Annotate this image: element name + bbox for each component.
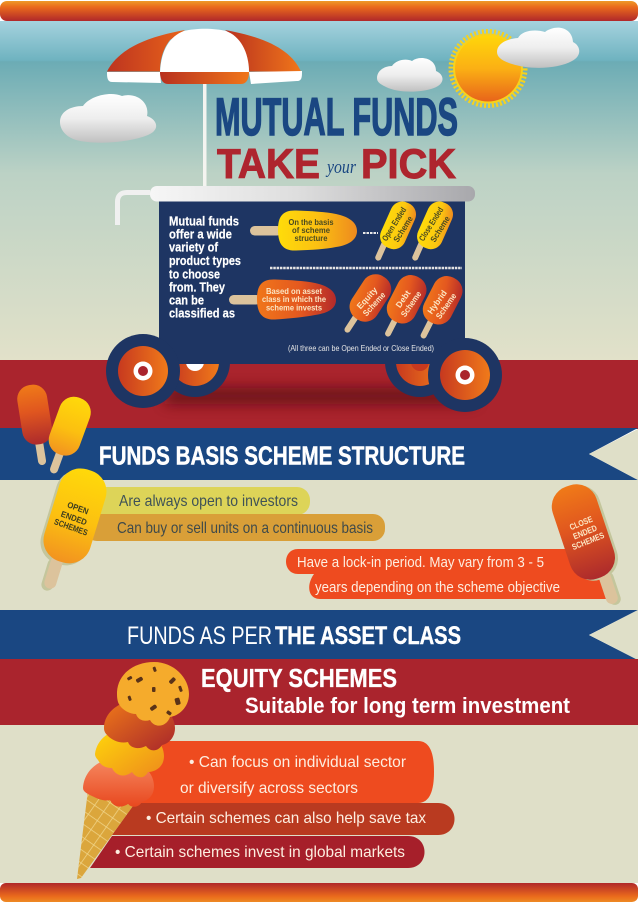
cart handle xyxy=(118,192,150,225)
title line: take your pick: PICK xyxy=(361,140,456,187)
popsicle: yellow decorative xyxy=(38,393,95,479)
pill: individual sector: • Can focus on individual sector xyxy=(189,754,407,771)
popsicle: open ended schemes: OPEN xyxy=(66,500,90,516)
popsicle: debt scheme xyxy=(374,270,431,344)
banner: equity schemes: EQUITY SCHEMES xyxy=(201,663,397,693)
banner: funds as per the asset class xyxy=(0,610,638,660)
cloud left xyxy=(60,94,156,143)
front wheels xyxy=(106,334,502,412)
title xyxy=(215,88,458,187)
cart intro text: Mutual funds xyxy=(169,214,239,228)
popsicle: open ended schemes: ENDED xyxy=(60,509,88,527)
pill: individual sector xyxy=(140,741,434,803)
popsicle: open ended schemes xyxy=(27,463,112,599)
pill: lock-in period xyxy=(286,549,612,599)
popsicle: open ended scheme: Scheme xyxy=(391,214,415,244)
sun xyxy=(451,32,525,106)
popsicle: close ended schemes xyxy=(546,479,633,614)
icon: ice cream cone xyxy=(77,662,189,879)
scoop: yellow xyxy=(95,728,164,777)
cart intro text: from. They xyxy=(169,280,226,295)
popsicle: asset class: scheme invests xyxy=(266,304,323,312)
cart top rail xyxy=(150,186,475,202)
banner: funds as per the asset class: THE ASSET CLASS xyxy=(275,622,461,650)
pill: lock-in period: Have a lock-in period. May vary from 3 - 5 xyxy=(297,554,544,571)
pill: global markets xyxy=(90,836,424,868)
popsicle: close ended schemes: ENDED xyxy=(572,523,598,541)
title line: mutual funds: MUTUAL FUNDS xyxy=(215,88,458,147)
title line: take your pick: your xyxy=(325,157,357,178)
cart intro text: variety of xyxy=(169,240,219,255)
equity section background xyxy=(0,725,638,883)
popsicle: open ended scheme xyxy=(370,198,420,268)
cloud middle xyxy=(377,58,443,92)
popsicle: scheme structure xyxy=(250,210,357,251)
popsicle: hybrid scheme xyxy=(410,271,467,345)
popsicle: equity scheme xyxy=(335,269,397,341)
banner: funds basis scheme structure: FUNDS BASIS SCHEME STRUCTURE xyxy=(99,442,465,470)
umbrella xyxy=(107,29,302,190)
sky background xyxy=(0,21,638,361)
title line: take your pick xyxy=(217,140,456,187)
title line: take your pick: TAKE xyxy=(217,140,320,187)
cart intro text: can be xyxy=(169,293,204,308)
pill: lock-in period: years depending on the scheme objective xyxy=(315,579,560,596)
popsicle: equity scheme: Equity xyxy=(355,285,380,311)
popsicle: asset class: Based on asset xyxy=(266,287,322,296)
popsicle: debt scheme: Scheme xyxy=(399,289,424,319)
popsicle: equity scheme: Scheme xyxy=(361,290,388,318)
banner: funds basis scheme structure xyxy=(0,428,638,480)
cart intro text: offer a wide xyxy=(169,226,232,242)
scoop: cookie dough with chips xyxy=(117,662,189,726)
dotted divider xyxy=(270,267,462,269)
pill: save tax xyxy=(112,803,454,835)
umbrella canopy xyxy=(107,29,302,84)
umbrella pole xyxy=(203,84,206,190)
pill: always open xyxy=(85,487,310,515)
popsicle: asset class xyxy=(229,279,336,320)
banner: funds as per the asset class: FUNDS AS PER xyxy=(127,622,272,650)
popsicle: close ended scheme: Scheme xyxy=(428,214,452,244)
popsicle: scheme structure: structure xyxy=(294,234,328,243)
scoop: coral xyxy=(83,758,154,807)
rear wheels xyxy=(160,327,455,397)
pill: individual sector: or diversify across sectors xyxy=(180,780,358,797)
pill: global markets: • Certain schemes invest in global markets xyxy=(115,844,405,861)
popsicle: hybrid scheme: Hybrid xyxy=(425,288,449,316)
pill: always open: Are always open to investors xyxy=(119,493,298,510)
popsicle: orange decorative xyxy=(15,383,57,467)
popsicle: close ended scheme: Close Ended xyxy=(417,205,445,243)
top bar xyxy=(0,1,638,21)
popsicle: close ended schemes: SCHEMES xyxy=(570,530,606,552)
popsicle: open ended schemes: SCHEMES xyxy=(53,516,89,538)
bottom bar xyxy=(0,883,638,902)
popsicle: scheme structure: of scheme xyxy=(292,226,331,235)
popsicle: debt scheme: Debt xyxy=(393,288,413,310)
waffle cone xyxy=(77,790,133,879)
cart shadow xyxy=(165,388,475,404)
popsicle: scheme structure: On the basis xyxy=(288,218,334,227)
red band xyxy=(0,360,638,429)
popsicle: close ended scheme xyxy=(407,198,457,268)
cart intro text: classified as xyxy=(169,305,235,320)
pill: buy or sell: Can buy or sell units on a continuous basis xyxy=(117,520,373,537)
cart intro text xyxy=(169,214,241,320)
pill: save tax: • Certain schemes can also help save tax xyxy=(146,810,426,827)
scoop: orange red xyxy=(104,700,175,750)
popsicle: asset class: class in which the xyxy=(262,295,327,304)
dashes to structure popsicles xyxy=(363,232,378,234)
popsicle: hybrid scheme: Scheme xyxy=(434,291,459,321)
pill: buy or sell xyxy=(85,514,385,541)
popsicle: open ended scheme: Open Ended xyxy=(380,205,408,243)
cart footnote: (All three can be Open Ended or Close Ended) xyxy=(288,344,434,353)
popsicle: close ended schemes: CLOSE xyxy=(568,514,594,532)
cloud top right xyxy=(497,28,579,68)
cart intro text: product types xyxy=(169,253,241,268)
banner: equity schemes xyxy=(0,659,638,725)
beige section background xyxy=(0,480,638,611)
banner: equity schemes: Suitable for long term investment xyxy=(245,693,571,718)
cart intro text: to choose xyxy=(169,266,220,282)
cart body xyxy=(159,200,465,364)
